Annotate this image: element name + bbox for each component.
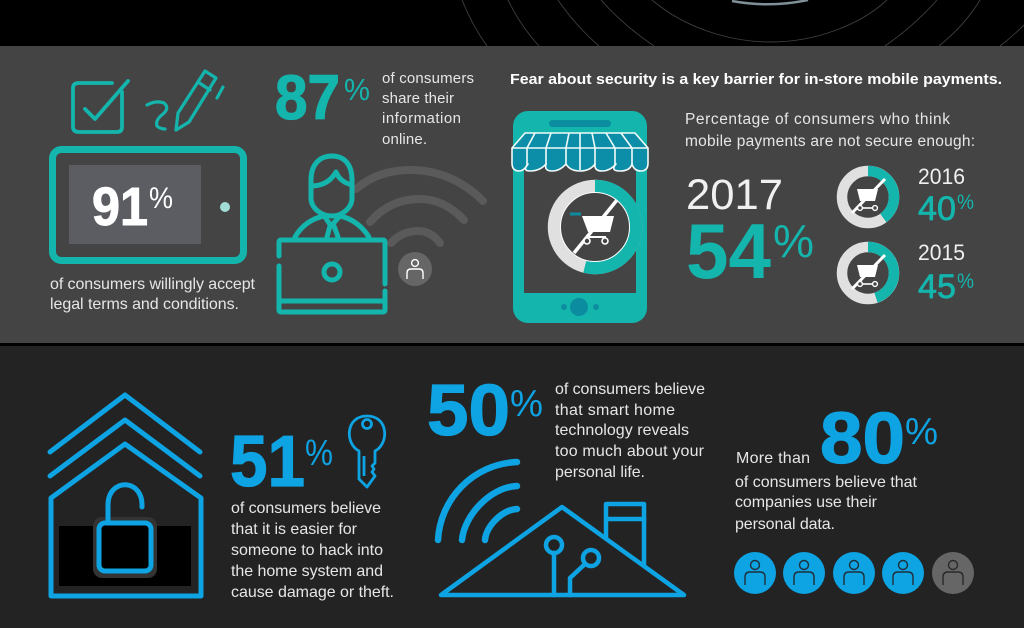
icon: wifi signal — [356, 170, 483, 243]
donut: 2016 40% — [842, 171, 894, 223]
stat: 2016 40%: 40 — [918, 190, 956, 228]
stat: 2017 54% — [686, 171, 814, 295]
stat: 2015 45% — [918, 240, 974, 306]
text: hack home system: cause damage or theft. — [231, 584, 394, 601]
text: smart home reveals — [555, 381, 705, 481]
stat: 2016 40% — [918, 164, 974, 228]
text: share information: share their — [382, 90, 454, 107]
text: more than 80% — [736, 399, 938, 479]
text: percentage of consumers: mobile payments are not secure enough: — [685, 133, 975, 150]
icon: phone storefront — [512, 111, 648, 323]
icon: checkbox — [73, 81, 128, 132]
stat: 87%: 87 — [275, 63, 340, 133]
donut: 54% — [554, 186, 636, 268]
text: hack home system: someone to hack into — [231, 542, 383, 559]
text: smart home reveals: too much about your — [555, 443, 705, 460]
stat: 2015 45%: 2015 — [918, 240, 965, 265]
stat: 2015 45%: % — [957, 270, 974, 293]
panel: data sharing and mobile payments — [0, 46, 1024, 343]
text: share information: online. — [382, 131, 427, 148]
stat: 50%: % — [510, 383, 543, 425]
stat: 50%: 50 — [427, 371, 510, 451]
icon: smart home roof circuit — [441, 504, 684, 595]
icon: pen with squiggle — [147, 71, 223, 130]
icon: tablet with 91% — [52, 150, 244, 260]
text: share information — [382, 70, 474, 148]
text: share information: information — [382, 110, 461, 127]
donut: 2015 45% — [842, 247, 894, 299]
icon: house with open lock — [50, 395, 201, 596]
stat: 2017 54%: 54 — [686, 207, 771, 295]
text: share information: of consumers — [382, 70, 474, 87]
text: legal terms: legal terms and conditions. — [50, 296, 239, 313]
text: smart home reveals: personal life. — [555, 464, 645, 481]
text: percentage of consumers: Percentage of consumers who think — [685, 111, 950, 128]
awning — [512, 133, 648, 171]
icon: person with laptop — [279, 156, 385, 312]
text: more than 80%: 80 — [820, 399, 905, 479]
text: more than 80%: More than — [736, 450, 810, 467]
text: hack home system: that it is easier for — [231, 521, 358, 538]
top decorative orbit arcs — [462, 0, 1024, 46]
text: legal terms — [50, 276, 256, 313]
text: companies use data: companies use their — [735, 494, 878, 511]
stat: 2016 40%: % — [957, 191, 974, 214]
panel: smart home concerns — [0, 346, 1024, 628]
text: hack home system — [231, 500, 394, 601]
text: smart home reveals: technology reveals — [555, 422, 689, 439]
text: smart home reveals: that smart home — [555, 402, 675, 419]
stat: 51%: % — [305, 432, 333, 473]
text: percentage of consumers — [685, 111, 975, 150]
text: hack home system: the home system and — [231, 563, 383, 580]
pictogram: 4 of 5 people — [734, 552, 974, 594]
stat: 2016 40%: 2016 — [918, 164, 965, 189]
text: companies use data: personal data. — [735, 516, 835, 533]
text: hack home system: of consumers believe — [231, 500, 381, 517]
text: companies use data — [735, 474, 918, 533]
stat: 2015 45%: 45 — [918, 268, 956, 306]
icon: key — [349, 416, 385, 487]
text: smart home reveals: of consumers believe — [555, 381, 705, 398]
percent sign: 91: % — [149, 182, 173, 215]
text: legal terms: of consumers willingly accept — [50, 276, 256, 293]
heading: security barrier: Fear about security is a key barrier for in-store mobile payments. — [510, 71, 1002, 88]
stat: 91%: 91 — [92, 177, 148, 237]
icon: wifi over roof — [438, 462, 517, 540]
stat: 2017 54%: 2017 — [686, 171, 783, 219]
text: companies use data: of consumers believe that — [735, 474, 918, 491]
stat: 51%: 51 — [230, 422, 305, 502]
text: more than 80%: % — [905, 411, 938, 453]
stat: 50% — [427, 371, 543, 451]
stat: 87%: % — [344, 72, 370, 107]
icon: user badge — [398, 252, 432, 286]
stat: 2017 54%: % — [773, 215, 814, 267]
